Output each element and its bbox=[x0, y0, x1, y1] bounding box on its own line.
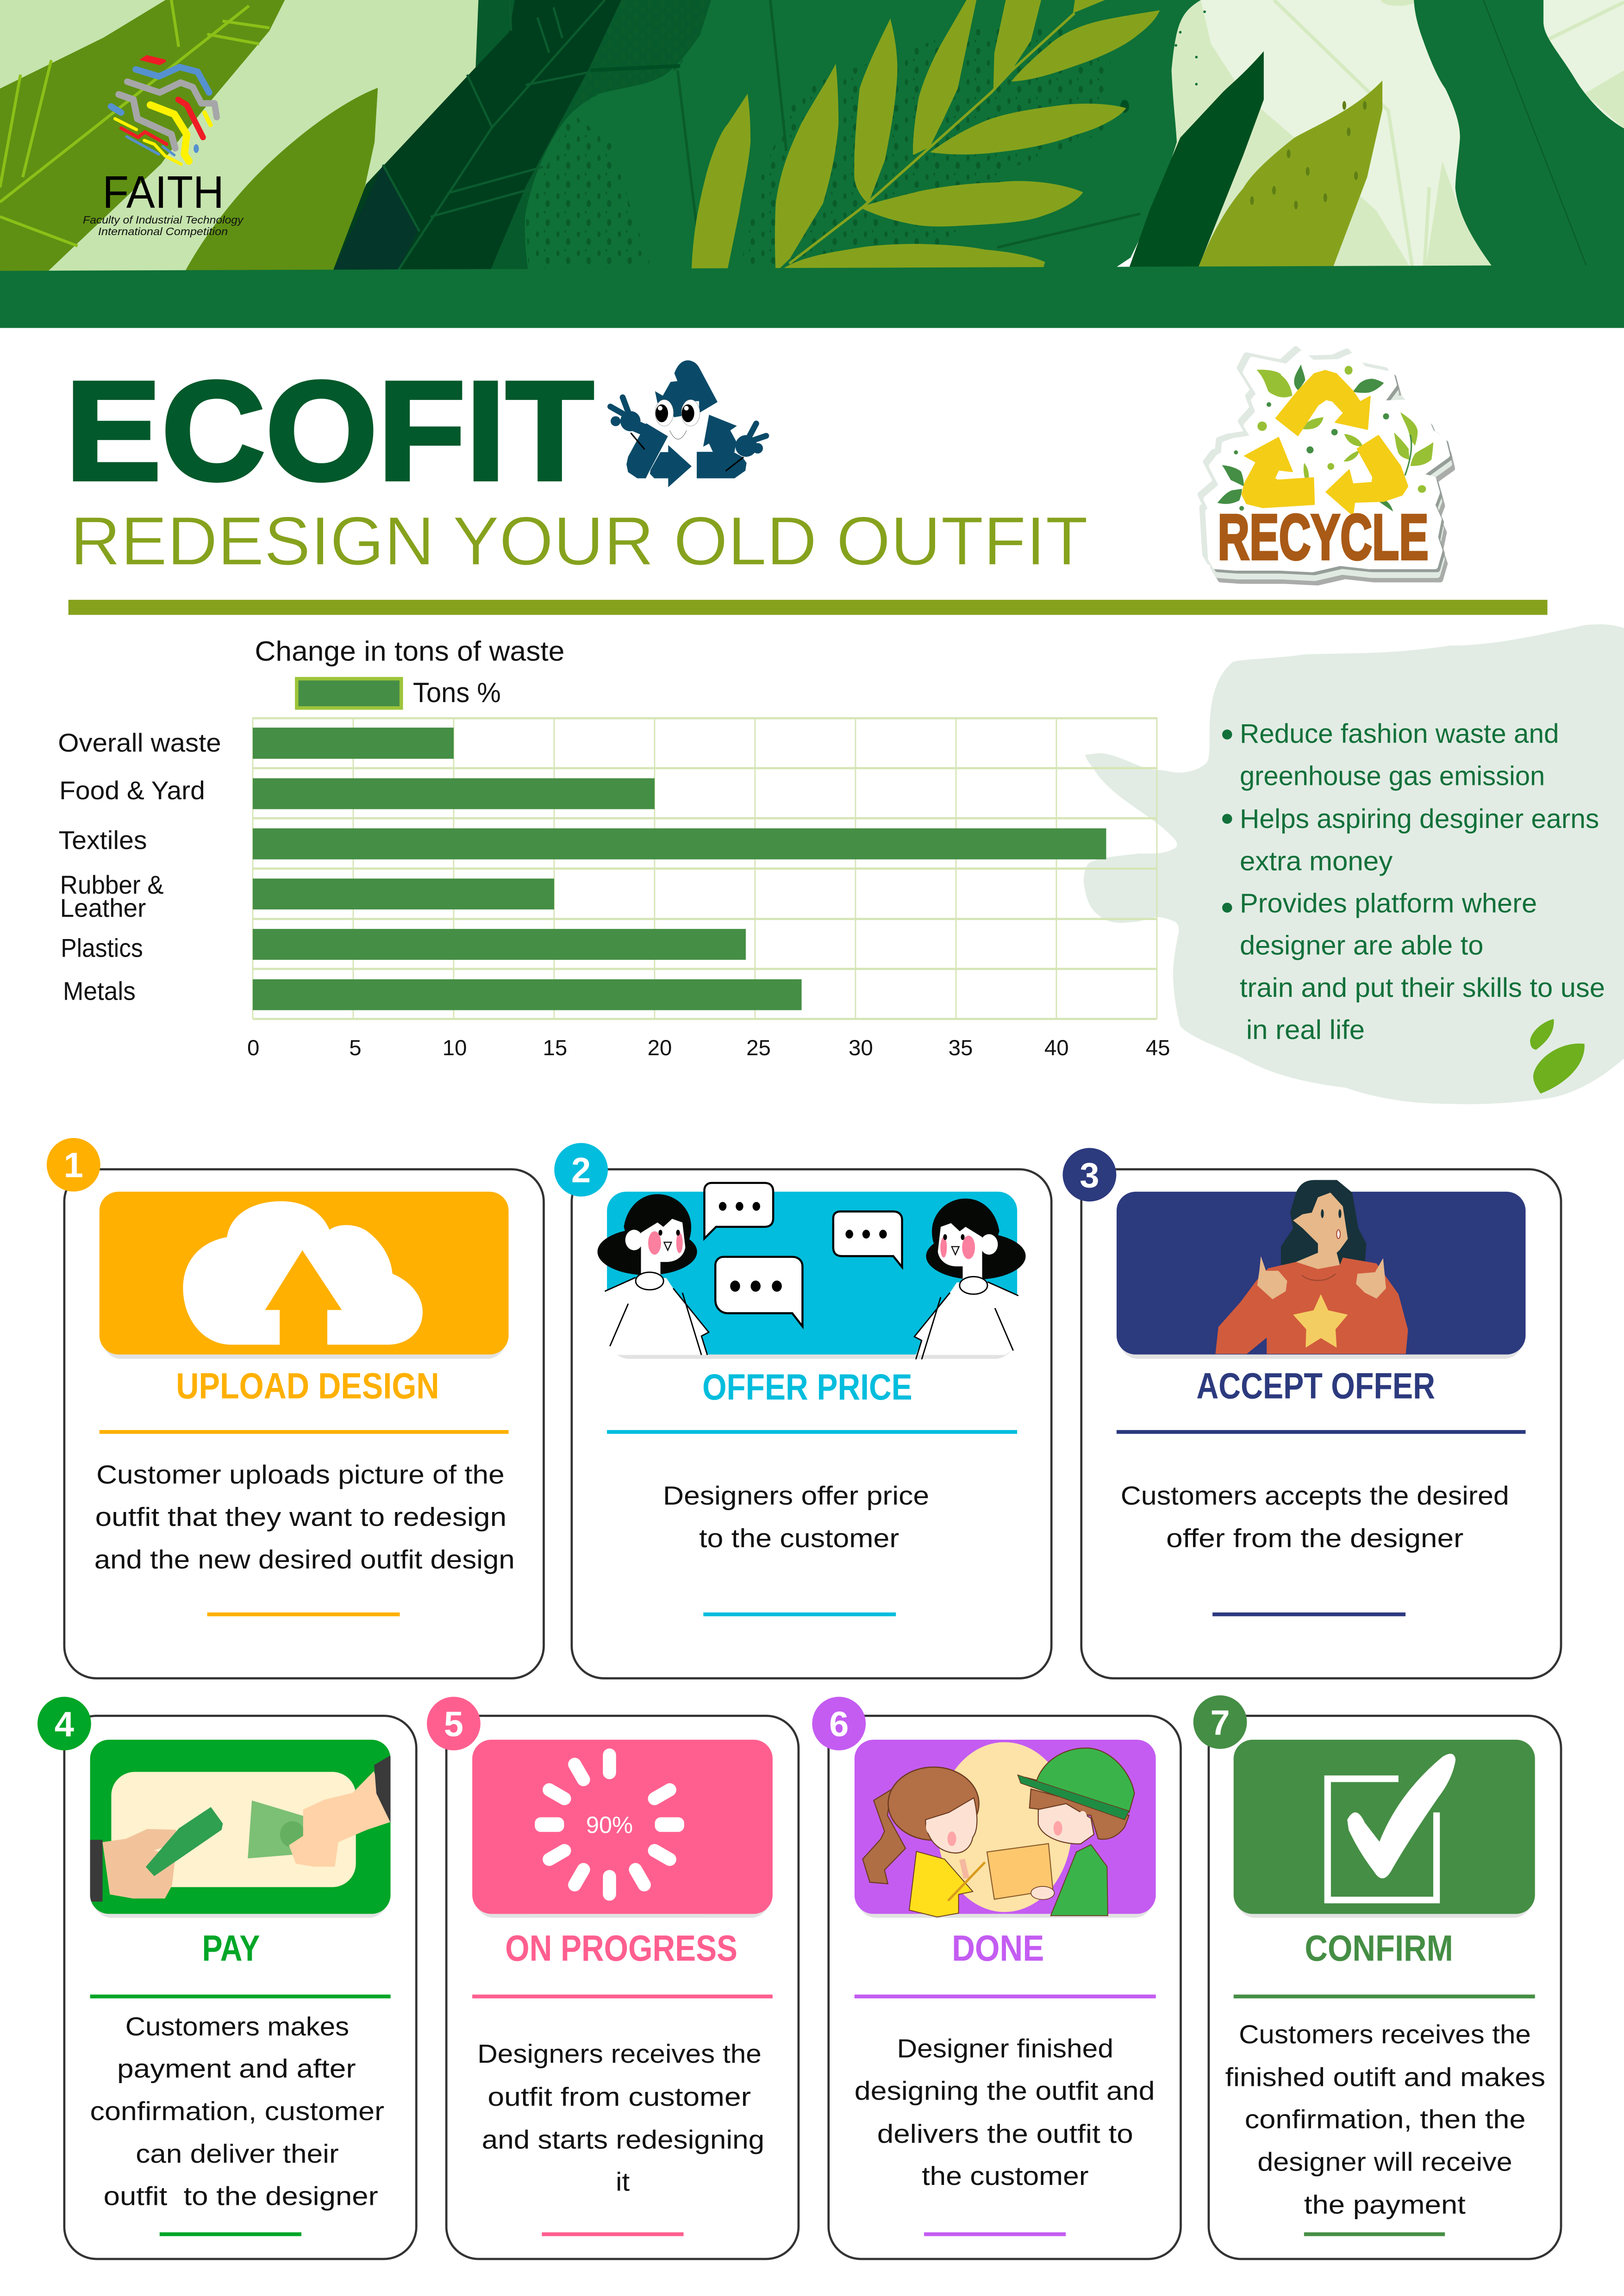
girl in yellow bbox=[862, 1767, 985, 1917]
step 1: upload design bbox=[47, 1138, 543, 1678]
step text bbox=[477, 2039, 764, 2197]
badge bbox=[427, 1697, 481, 1750]
step text: Customers receives the bbox=[1239, 2020, 1531, 2049]
step text bbox=[1121, 1481, 1509, 1553]
callout: benefits list: in real life bbox=[1246, 1015, 1365, 1045]
chart: change in tons of waste bbox=[58, 636, 1170, 1060]
step text: outfit from customer bbox=[487, 2082, 751, 2112]
step title: CONFIRM bbox=[1305, 1927, 1453, 1968]
category labels: Food & Yard bbox=[59, 776, 205, 805]
step text: designer will receive bbox=[1257, 2147, 1512, 2177]
step text: payment and after bbox=[117, 2054, 356, 2084]
axis values: 5 bbox=[349, 1036, 362, 1060]
step text: can deliver their bbox=[136, 2139, 339, 2169]
axis values: 35 bbox=[949, 1036, 973, 1060]
image panel bbox=[1234, 1740, 1535, 1918]
icon: recycle mascot bbox=[610, 360, 766, 487]
step text bbox=[90, 2012, 384, 2211]
category labels: Plastics bbox=[61, 934, 143, 963]
image panel bbox=[472, 1740, 773, 1918]
category labels: Leather bbox=[60, 894, 146, 922]
logo: FAITH bbox=[83, 55, 244, 237]
step 2: offer price bbox=[554, 1143, 1051, 1678]
boy with parcel bbox=[987, 1748, 1135, 1916]
badge bbox=[812, 1697, 866, 1750]
step text: confirmation, customer bbox=[90, 2097, 384, 2126]
icon: recycle sticker bbox=[1200, 349, 1452, 583]
badge: 2 bbox=[571, 1151, 591, 1190]
step text: the customer bbox=[922, 2161, 1089, 2191]
step 7: confirm bbox=[1193, 1695, 1561, 2259]
woman thumbs up bbox=[1215, 1180, 1408, 1354]
header: leaf artwork banner bbox=[0, 0, 1624, 328]
image panel bbox=[598, 1183, 1026, 1359]
card frame bbox=[572, 1170, 1051, 1678]
step 5: on progress bbox=[427, 1697, 799, 2259]
sticker recycling arrows bbox=[1242, 371, 1408, 515]
person right bbox=[914, 1199, 1026, 1359]
step text: Designer finished bbox=[897, 2034, 1113, 2063]
subtitle: redesign your old outfit: REDESIGN YOUR OLD OUTFIT bbox=[70, 502, 1088, 579]
badge: 6 bbox=[829, 1705, 849, 1744]
step text: Customer uploads picture of the bbox=[96, 1460, 505, 1489]
axis values: 45 bbox=[1146, 1036, 1170, 1060]
callout: benefits list: Provides platform where bbox=[1240, 888, 1537, 918]
category labels bbox=[58, 728, 221, 1006]
step text: finished outift and makes bbox=[1225, 2063, 1545, 2092]
axis values bbox=[247, 1036, 1170, 1060]
chart legend bbox=[297, 677, 501, 708]
step text: it bbox=[616, 2167, 630, 2197]
callout: benefits list bbox=[1222, 719, 1605, 1045]
step 4: pay bbox=[37, 1697, 416, 2259]
chart title: Change in tons of waste bbox=[255, 636, 564, 667]
sticker leaves bbox=[1218, 364, 1433, 511]
icon: cloud upload bbox=[183, 1201, 423, 1344]
logo subtitle: International Competition bbox=[98, 225, 228, 237]
sticker shadow and white contour bbox=[1200, 349, 1452, 583]
category labels: Textiles bbox=[59, 826, 147, 855]
logo subtitle bbox=[83, 214, 244, 237]
card frame bbox=[64, 1716, 416, 2259]
step title: UPLOAD DESIGN bbox=[176, 1365, 439, 1406]
badge: 7 bbox=[1210, 1704, 1230, 1743]
image panel bbox=[1117, 1180, 1525, 1359]
category labels: Overall waste bbox=[58, 728, 221, 757]
step text: confirmation, then the bbox=[1245, 2104, 1525, 2134]
spinner ticks bbox=[535, 1748, 684, 1901]
progress value: 90% bbox=[586, 1811, 633, 1838]
image panel bbox=[89, 1740, 391, 1918]
card frame bbox=[64, 1170, 543, 1678]
step text: Customers accepts the desired bbox=[1121, 1481, 1509, 1511]
step text: the payment bbox=[1304, 2190, 1466, 2220]
callout blob background bbox=[1084, 624, 1624, 1104]
axis values: 10 bbox=[443, 1036, 467, 1060]
badge bbox=[554, 1143, 608, 1196]
badge bbox=[1193, 1695, 1247, 1749]
axis values: 0 bbox=[247, 1036, 259, 1060]
step text: and starts redesigning bbox=[482, 2125, 764, 2154]
axis values: 25 bbox=[746, 1036, 771, 1060]
step text: delivers the outfit to bbox=[877, 2119, 1133, 2149]
person left bbox=[598, 1194, 709, 1355]
step text bbox=[94, 1460, 515, 1574]
chart legend: Tons % bbox=[413, 677, 501, 708]
badge bbox=[47, 1138, 100, 1192]
badge: 5 bbox=[444, 1705, 463, 1744]
icon: check box bbox=[1328, 1779, 1437, 1900]
speech bubbles bbox=[705, 1183, 902, 1326]
step text: and the new desired outfit design bbox=[94, 1545, 515, 1574]
logo name: FAITH bbox=[102, 167, 224, 218]
callout: benefits list: greenhouse gas emission bbox=[1240, 761, 1545, 791]
image panel bbox=[100, 1192, 509, 1359]
step title: ON PROGRESS bbox=[505, 1927, 737, 1968]
badge bbox=[37, 1697, 91, 1750]
logo subtitle: Faculty of Industrial Technology bbox=[83, 214, 244, 226]
step text: Designers offer price bbox=[663, 1481, 929, 1511]
step text: Customers makes bbox=[125, 2012, 349, 2041]
axis values: 20 bbox=[648, 1036, 672, 1060]
icon: green leaves bbox=[1530, 1019, 1585, 1094]
badge: 1 bbox=[64, 1145, 83, 1185]
axis values: 30 bbox=[849, 1036, 873, 1060]
step text bbox=[663, 1481, 929, 1553]
category labels: Rubber & bbox=[60, 871, 164, 899]
step title: PAY bbox=[202, 1927, 260, 1968]
sticker word: RECYCLE bbox=[1218, 501, 1429, 573]
category labels: Metals bbox=[63, 977, 136, 1006]
step title: DONE bbox=[952, 1927, 1044, 1968]
step text: designing the outfit and bbox=[855, 2076, 1155, 2106]
step 3: accept offer bbox=[1063, 1148, 1561, 1678]
step text: offer from the designer bbox=[1166, 1524, 1463, 1553]
callout: benefits list: Reduce fashion waste and bbox=[1240, 719, 1559, 749]
card frame bbox=[1081, 1170, 1561, 1678]
step title: OFFER PRICE bbox=[702, 1366, 912, 1407]
icon: check mark bbox=[1347, 1754, 1455, 1879]
card frame bbox=[1209, 1716, 1561, 2259]
callout: benefits list: train and put their skills to use bbox=[1240, 973, 1605, 1003]
divider bar: olive bbox=[69, 600, 1548, 615]
step text bbox=[1225, 2020, 1545, 2220]
step text bbox=[855, 2034, 1155, 2191]
step text: outfit that they want to redesign bbox=[95, 1502, 506, 1532]
step text: Designers receives the bbox=[477, 2039, 762, 2069]
callout: benefits list: designer are able to bbox=[1240, 930, 1483, 960]
step 6: done bbox=[812, 1697, 1181, 2259]
step text: to the customer bbox=[699, 1524, 899, 1553]
card frame bbox=[446, 1716, 799, 2259]
axis values: 15 bbox=[543, 1036, 567, 1060]
callout: benefits list: Helps aspiring desginer earns bbox=[1240, 804, 1599, 834]
badge: 3 bbox=[1080, 1156, 1099, 1195]
badge: 4 bbox=[55, 1705, 74, 1744]
hand with banknote left bbox=[89, 1807, 223, 1902]
step title: ACCEPT OFFER bbox=[1196, 1365, 1435, 1406]
bars bbox=[253, 728, 1106, 1010]
axis values: 40 bbox=[1044, 1036, 1069, 1060]
badge bbox=[1063, 1148, 1116, 1201]
card frame bbox=[829, 1716, 1181, 2259]
logo mark: coloured zigzag ribbons bbox=[111, 55, 217, 164]
title: ECOFIT: ECOFIT bbox=[65, 352, 594, 510]
hand with banknote right bbox=[248, 1755, 391, 1867]
step text: outfit to the designer bbox=[104, 2182, 378, 2211]
image panel bbox=[855, 1740, 1156, 1918]
callout: benefits list: extra money bbox=[1240, 846, 1393, 876]
